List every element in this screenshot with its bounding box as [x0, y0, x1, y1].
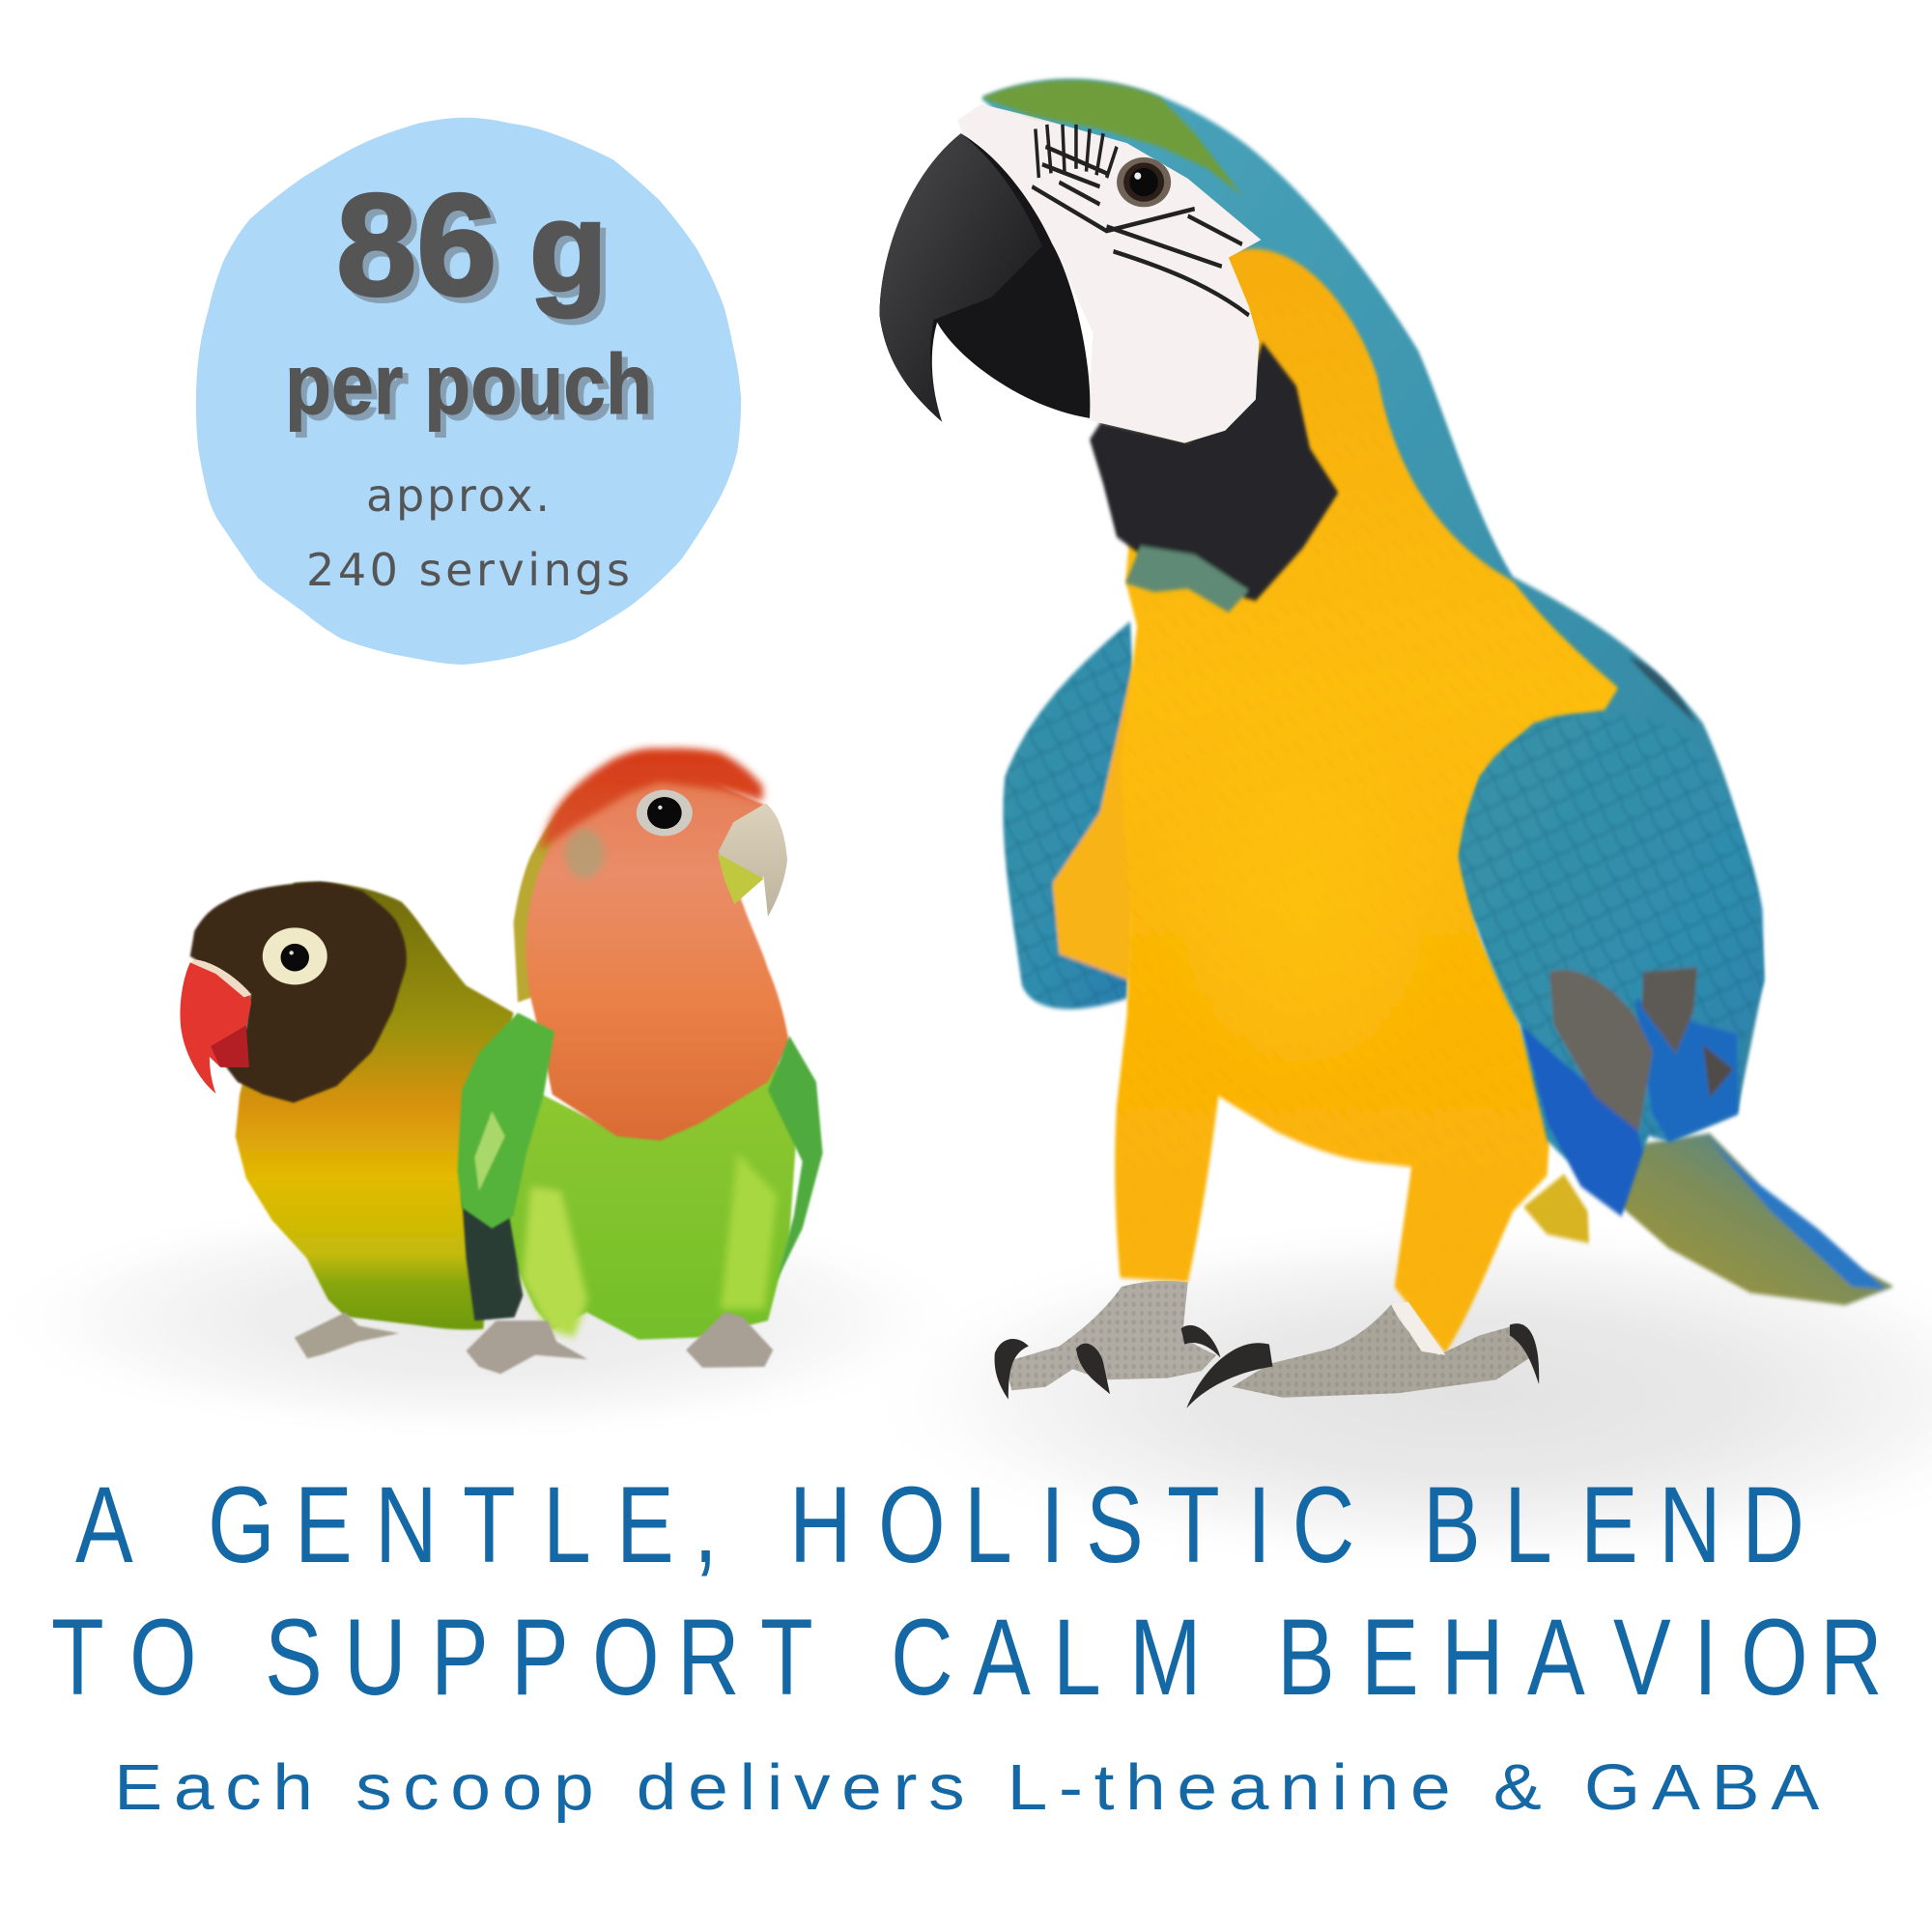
heading line 1: A GENTLE, HOLISTIC BLEND — [75, 1465, 1804, 1585]
peach lovebird orange head and chest — [526, 759, 789, 1141]
peach lovebird green body — [492, 1061, 798, 1340]
macaw tail — [1523, 1133, 1894, 1305]
macaw green crown — [981, 80, 1242, 195]
macaw eye — [1117, 157, 1171, 207]
peach lovebird left wing — [458, 1012, 554, 1229]
peach-faced lovebird — [458, 748, 823, 1374]
peach lovebird feet — [466, 1313, 773, 1374]
macaw inner wing yellow — [1052, 662, 1135, 980]
subheading: Each scoop delivers L-theanine & GABA — [114, 1752, 1820, 1824]
heading line 2: TO SUPPORT CALM BEHAVIOR — [51, 1598, 1883, 1718]
macaw beak silhouette — [880, 133, 1090, 422]
peach lovebird beak — [719, 804, 787, 917]
macaw near wing back — [1003, 621, 1137, 1009]
masked lovebird body — [236, 882, 514, 1329]
masked lovebird foot — [295, 1313, 399, 1358]
macaw face stripes — [1032, 125, 1249, 315]
masked lovebird dark head — [190, 882, 407, 1103]
macaw dark back streak — [1629, 657, 1696, 724]
peach lovebird leg highlight — [523, 1186, 587, 1338]
macaw — [880, 79, 1894, 1408]
masked lovebird eye — [263, 927, 327, 984]
macaw black collar — [1090, 342, 1338, 612]
badge: weight per pouch — [196, 118, 741, 665]
weight amount: g — [529, 176, 608, 318]
peach lovebird eye — [637, 790, 693, 836]
macaw right wing — [1459, 713, 1764, 1216]
servings label: 240 servings — [306, 544, 630, 596]
shadow under lovebirds — [0, 1193, 985, 1444]
macaw white face — [957, 104, 1261, 443]
peach lovebird right wing — [768, 1036, 823, 1281]
macaw chin feathers — [1125, 546, 1249, 612]
macaw yellow body — [1115, 249, 1618, 1353]
per pouch label: per pouch — [285, 336, 652, 432]
peach lovebird red cap — [539, 748, 763, 851]
peach lovebird grey cheek — [565, 829, 604, 879]
lovebirds — [180, 748, 823, 1374]
macaw right foot — [1186, 1302, 1539, 1408]
masked lovebird beak — [180, 962, 251, 1094]
badge blob — [196, 118, 741, 665]
shadow under macaw — [850, 1212, 1932, 1579]
approx label: approx. — [366, 469, 550, 522]
masked lovebird — [180, 882, 514, 1358]
macaw left foot — [995, 1281, 1220, 1400]
weight amount: 86 — [336, 163, 497, 326]
peach lovebird nape — [514, 788, 579, 1003]
macaw back and head — [981, 79, 1764, 1142]
peach lovebird dark under wing — [462, 1195, 523, 1321]
macaw upper beak — [880, 133, 1042, 422]
